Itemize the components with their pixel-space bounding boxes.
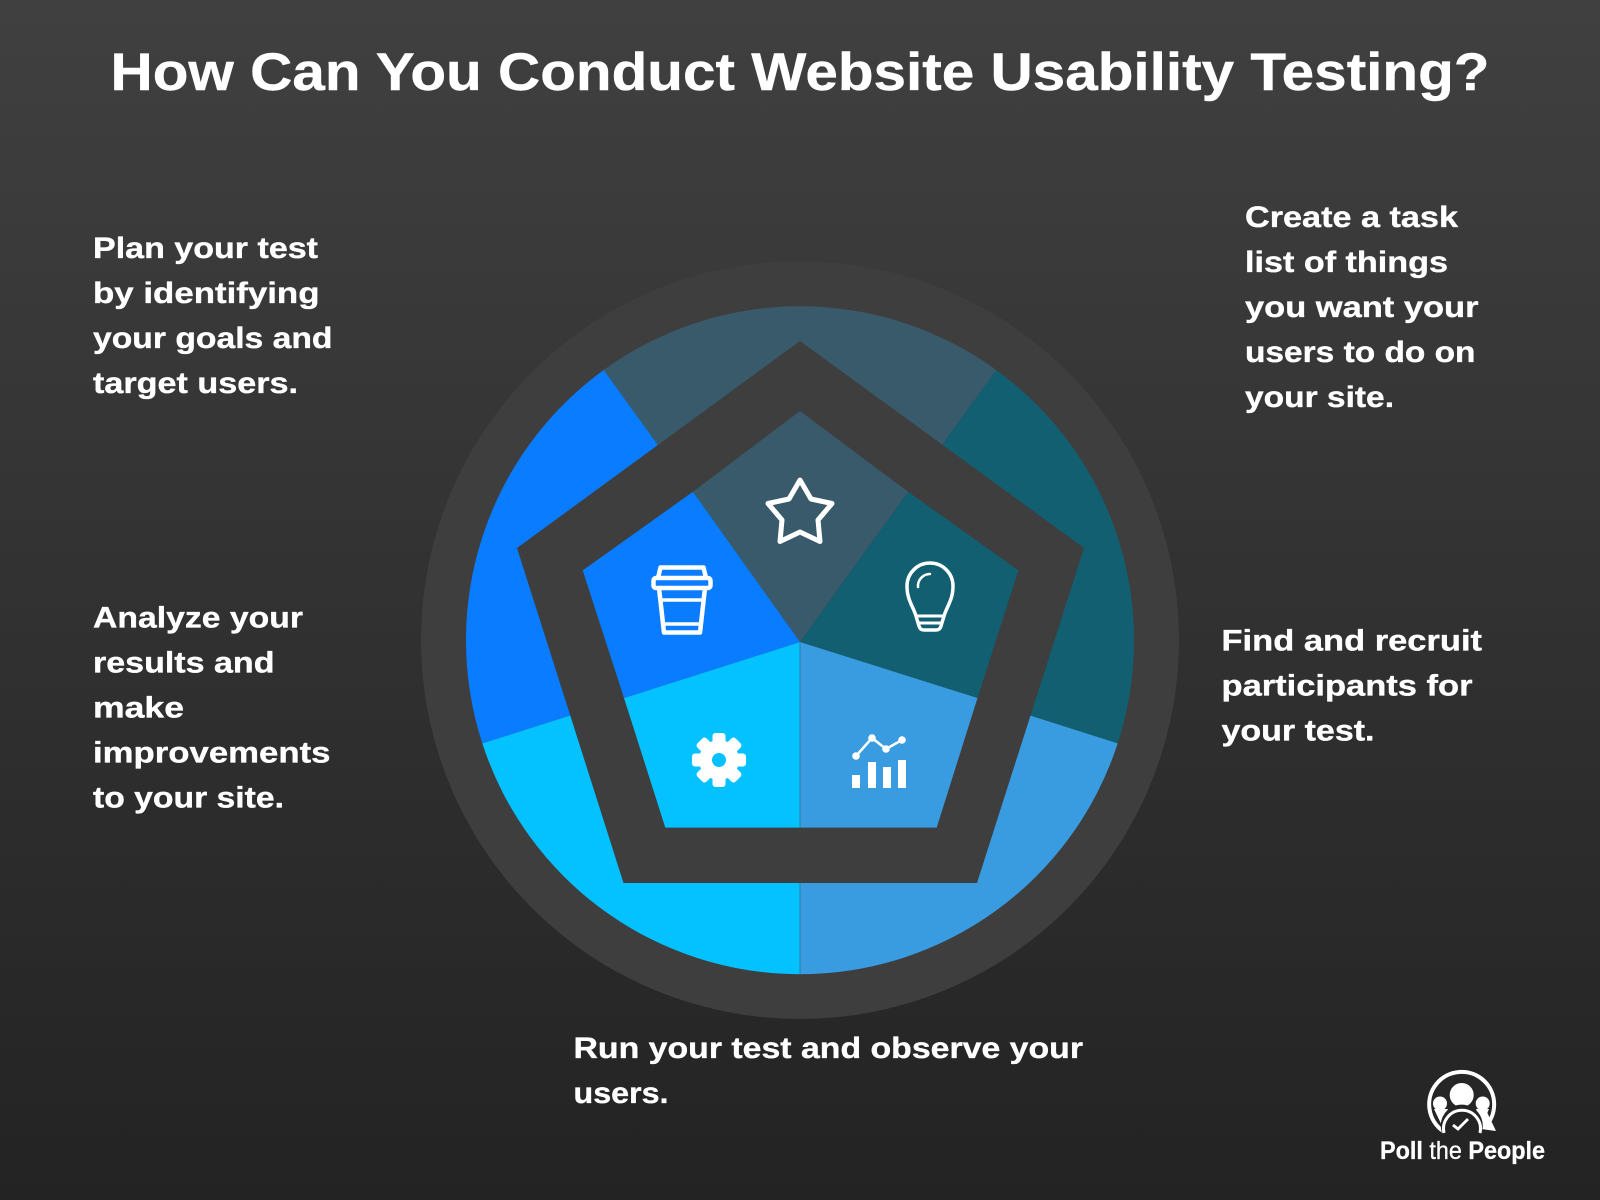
icon: light bulb <box>907 563 953 630</box>
text block: create a task list: Create a task <box>1245 201 1458 234</box>
text block: run your test: users. <box>574 1077 668 1110</box>
pentagon wheel diagram <box>421 261 1179 1019</box>
text block: find and recruit: participants for <box>1222 670 1473 702</box>
text block: find and recruit <box>1222 624 1482 748</box>
outer wedge: left <box>466 370 800 743</box>
inner wedge: left <box>583 492 800 698</box>
text block: analyze results: make <box>93 692 184 724</box>
logo mark <box>1429 1072 1496 1134</box>
logo: Poll the People <box>1380 1072 1545 1165</box>
inner wedge: lower left <box>624 642 800 828</box>
title: How Can You Conduct Website Usability Testing? <box>110 43 1490 102</box>
text block: create a task list: you want your <box>1245 291 1479 324</box>
text block: create a task list: your site. <box>1245 381 1394 414</box>
outer wedge: lower left <box>482 642 800 974</box>
text block: analyze results: results and <box>93 646 274 680</box>
text block: create a task list <box>1245 201 1479 414</box>
text block: create a task list: list of things <box>1245 246 1448 279</box>
text block: run your test: Run your test and observe your <box>574 1032 1083 1065</box>
icon: bar and line chart <box>852 734 906 788</box>
outer wedge: lower right <box>800 642 1118 974</box>
text block: analyze results: improvements <box>93 736 330 770</box>
logo wordmark: Poll the People <box>1380 1137 1545 1165</box>
inner wedge: lower right <box>800 642 978 828</box>
inner wedge: top <box>693 411 908 642</box>
outer wedge: upper right <box>800 370 1134 743</box>
text block: find and recruit: Find and recruit <box>1222 624 1482 658</box>
text block: plan your test: by identifying <box>93 277 320 310</box>
text block: find and recruit: your test. <box>1222 714 1374 748</box>
text block: plan your test: Plan your test <box>93 232 318 265</box>
inner wedge: upper right <box>800 492 1018 698</box>
text block: analyze results <box>93 602 330 814</box>
text block: run your test <box>574 1032 1083 1110</box>
icon: coffee cup <box>654 568 710 632</box>
outer ring <box>421 261 1179 1019</box>
outer wedge: top <box>604 306 996 642</box>
pentagon band <box>517 341 1084 883</box>
text block: analyze results: Analyze your <box>93 602 303 634</box>
text block: create a task list: users to do on <box>1245 336 1476 369</box>
icon: star <box>768 480 832 542</box>
text block: plan your test: your goals and <box>93 322 332 355</box>
icon: gear <box>692 733 746 787</box>
text block: analyze results: to your site. <box>93 782 284 814</box>
text block: plan your test <box>93 232 332 400</box>
text block: plan your test: target users. <box>93 367 298 400</box>
